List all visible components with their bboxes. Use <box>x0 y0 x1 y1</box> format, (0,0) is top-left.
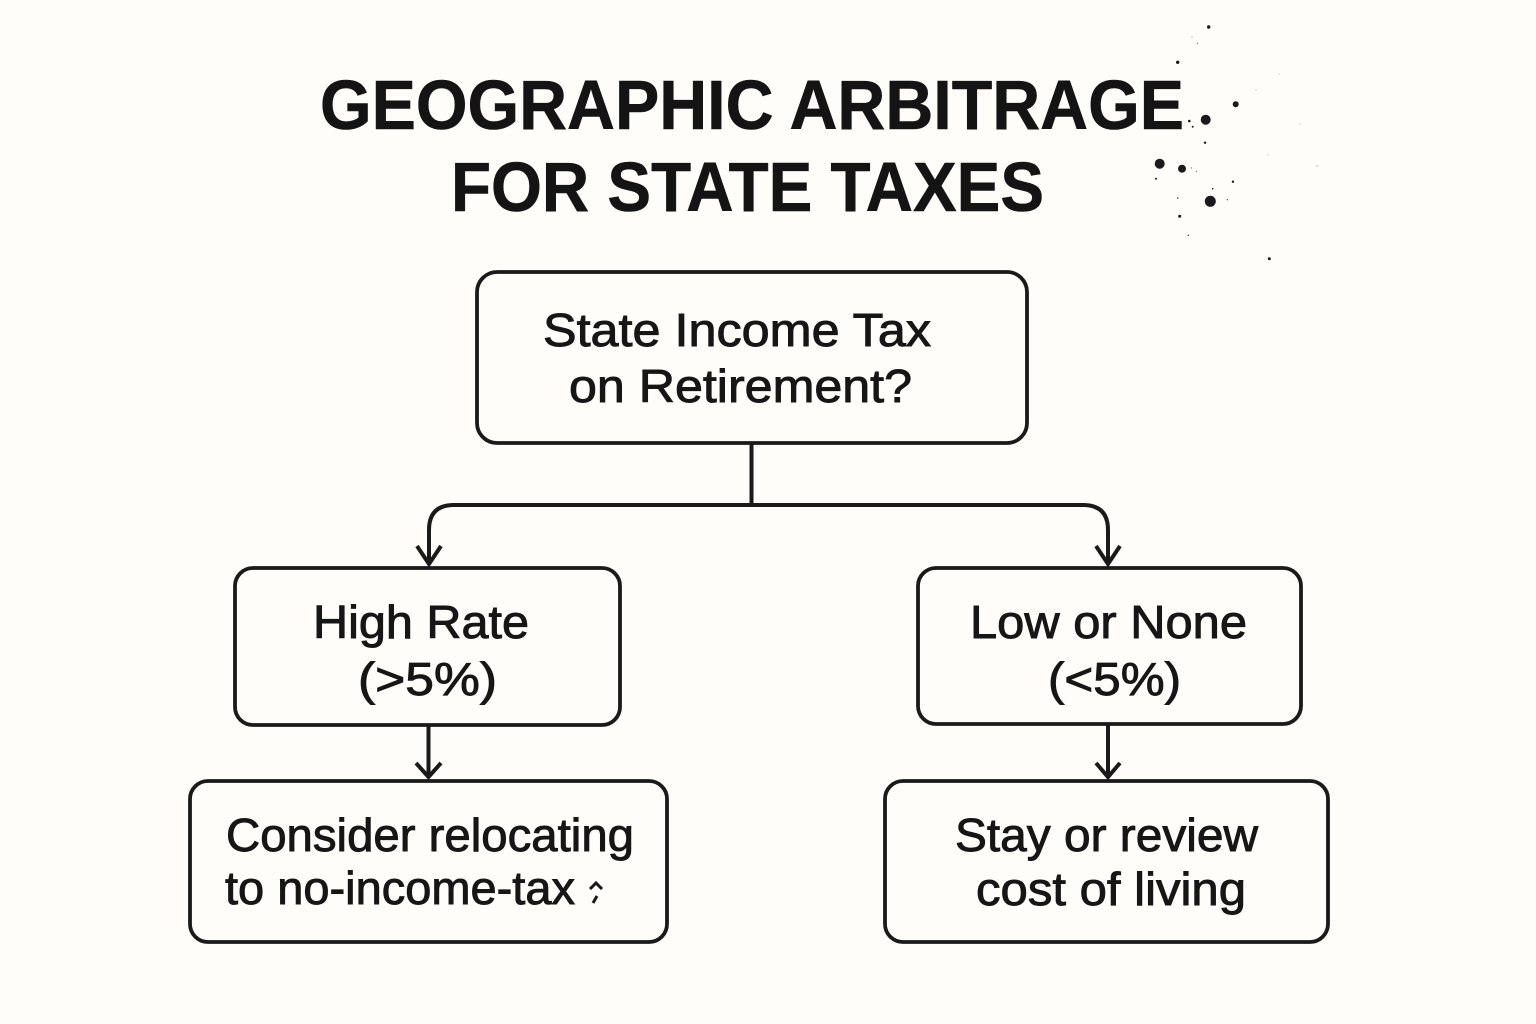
title <box>320 66 1184 226</box>
arrow: low or none to stay or review <box>1096 724 1120 777</box>
panel: consider relocating: to no-income-tax <box>225 862 575 914</box>
panel: consider relocating: Consider relocating <box>226 809 634 861</box>
panel: low or none <box>918 568 1301 724</box>
panel: low or none: Low or None <box>970 596 1247 648</box>
panel: state income tax question: on Retirement? <box>569 360 912 412</box>
title: GEOGRAPHIC ARBITRAGE <box>320 66 1184 144</box>
panel: high rate: High Rate <box>313 596 529 648</box>
panel: state income tax question <box>477 272 1027 443</box>
panel: high rate <box>235 568 620 725</box>
arrowhead: to high rate <box>417 546 441 564</box>
panel: stay or review: cost of living <box>976 863 1246 915</box>
arrowhead: to low or none <box>1096 546 1120 564</box>
garbled glyph artifact <box>590 883 602 903</box>
panel: high rate: (>5%) <box>358 653 497 705</box>
panel: state income tax question: State Income Tax <box>543 304 931 356</box>
panel: low or none: (<5%) <box>1048 653 1181 705</box>
panel: consider relocating <box>190 781 667 942</box>
connector: top box to branch <box>429 443 1108 564</box>
ink speckle decoration <box>1155 25 1318 260</box>
panel: stay or review <box>885 781 1328 942</box>
title: FOR STATE TAXES <box>451 148 1044 226</box>
panel: stay or review: Stay or review <box>955 809 1259 861</box>
arrow: high rate to consider relocating <box>416 725 441 777</box>
